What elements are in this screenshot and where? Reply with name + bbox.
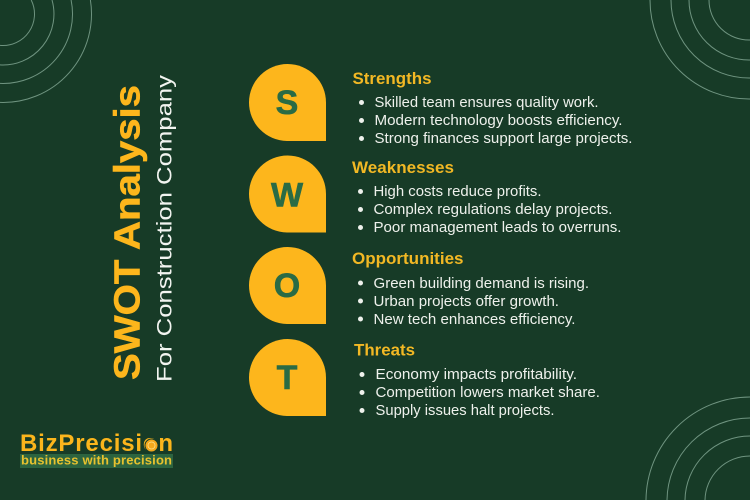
list: threats: Supply issues halt projects. — [376, 403, 554, 419]
list: opportunities: Urban projects offer growth. — [374, 294, 559, 310]
heading: threats: Threats — [354, 342, 415, 360]
list: weaknesses — [358, 184, 622, 236]
list: opportunities: New tech enhances efficiency. — [374, 312, 576, 328]
list: strengths: Strong finances support large projects. — [374, 131, 632, 147]
list: opportunities — [358, 276, 589, 328]
badge: O: O — [274, 267, 300, 305]
badge: W: W — [271, 176, 304, 214]
list: weaknesses: Poor management leads to overruns. — [374, 220, 622, 236]
badge: W — [249, 156, 326, 232]
logo: BizPrecision: BizPrecision — [20, 430, 173, 457]
list: threats: Economy impacts profitability. — [376, 367, 577, 383]
list: weaknesses: High costs reduce profits. — [374, 184, 542, 200]
badge: T — [249, 339, 326, 416]
panel: strengths — [352, 70, 632, 147]
list: weaknesses: Complex regulations delay projects. — [374, 202, 612, 218]
badge: S — [249, 64, 326, 141]
list: threats — [360, 367, 600, 419]
heading: weaknesses: Weaknesses — [352, 159, 454, 177]
heading: strengths: Strengths — [352, 70, 432, 88]
subtitle: For Construction Company — [154, 74, 177, 382]
list: threats: Competition lowers market share. — [376, 385, 600, 401]
list: strengths — [359, 95, 632, 147]
badge: S: S — [276, 84, 298, 122]
logo: BizPrecision: business with precision — [21, 452, 172, 468]
panel: threats — [354, 342, 600, 419]
panel: opportunities — [352, 250, 589, 328]
title: SWOT Analysis — [106, 85, 148, 380]
badge: T: T — [277, 359, 298, 397]
panel: weaknesses — [352, 159, 622, 236]
list: strengths: Skilled team ensures quality work. — [374, 95, 598, 111]
heading: opportunities: Opportunities — [352, 250, 464, 268]
list: strengths: Modern technology boosts efficiency. — [374, 113, 622, 129]
badge: O — [249, 247, 326, 324]
list: opportunities: Green building demand is rising. — [374, 276, 589, 292]
